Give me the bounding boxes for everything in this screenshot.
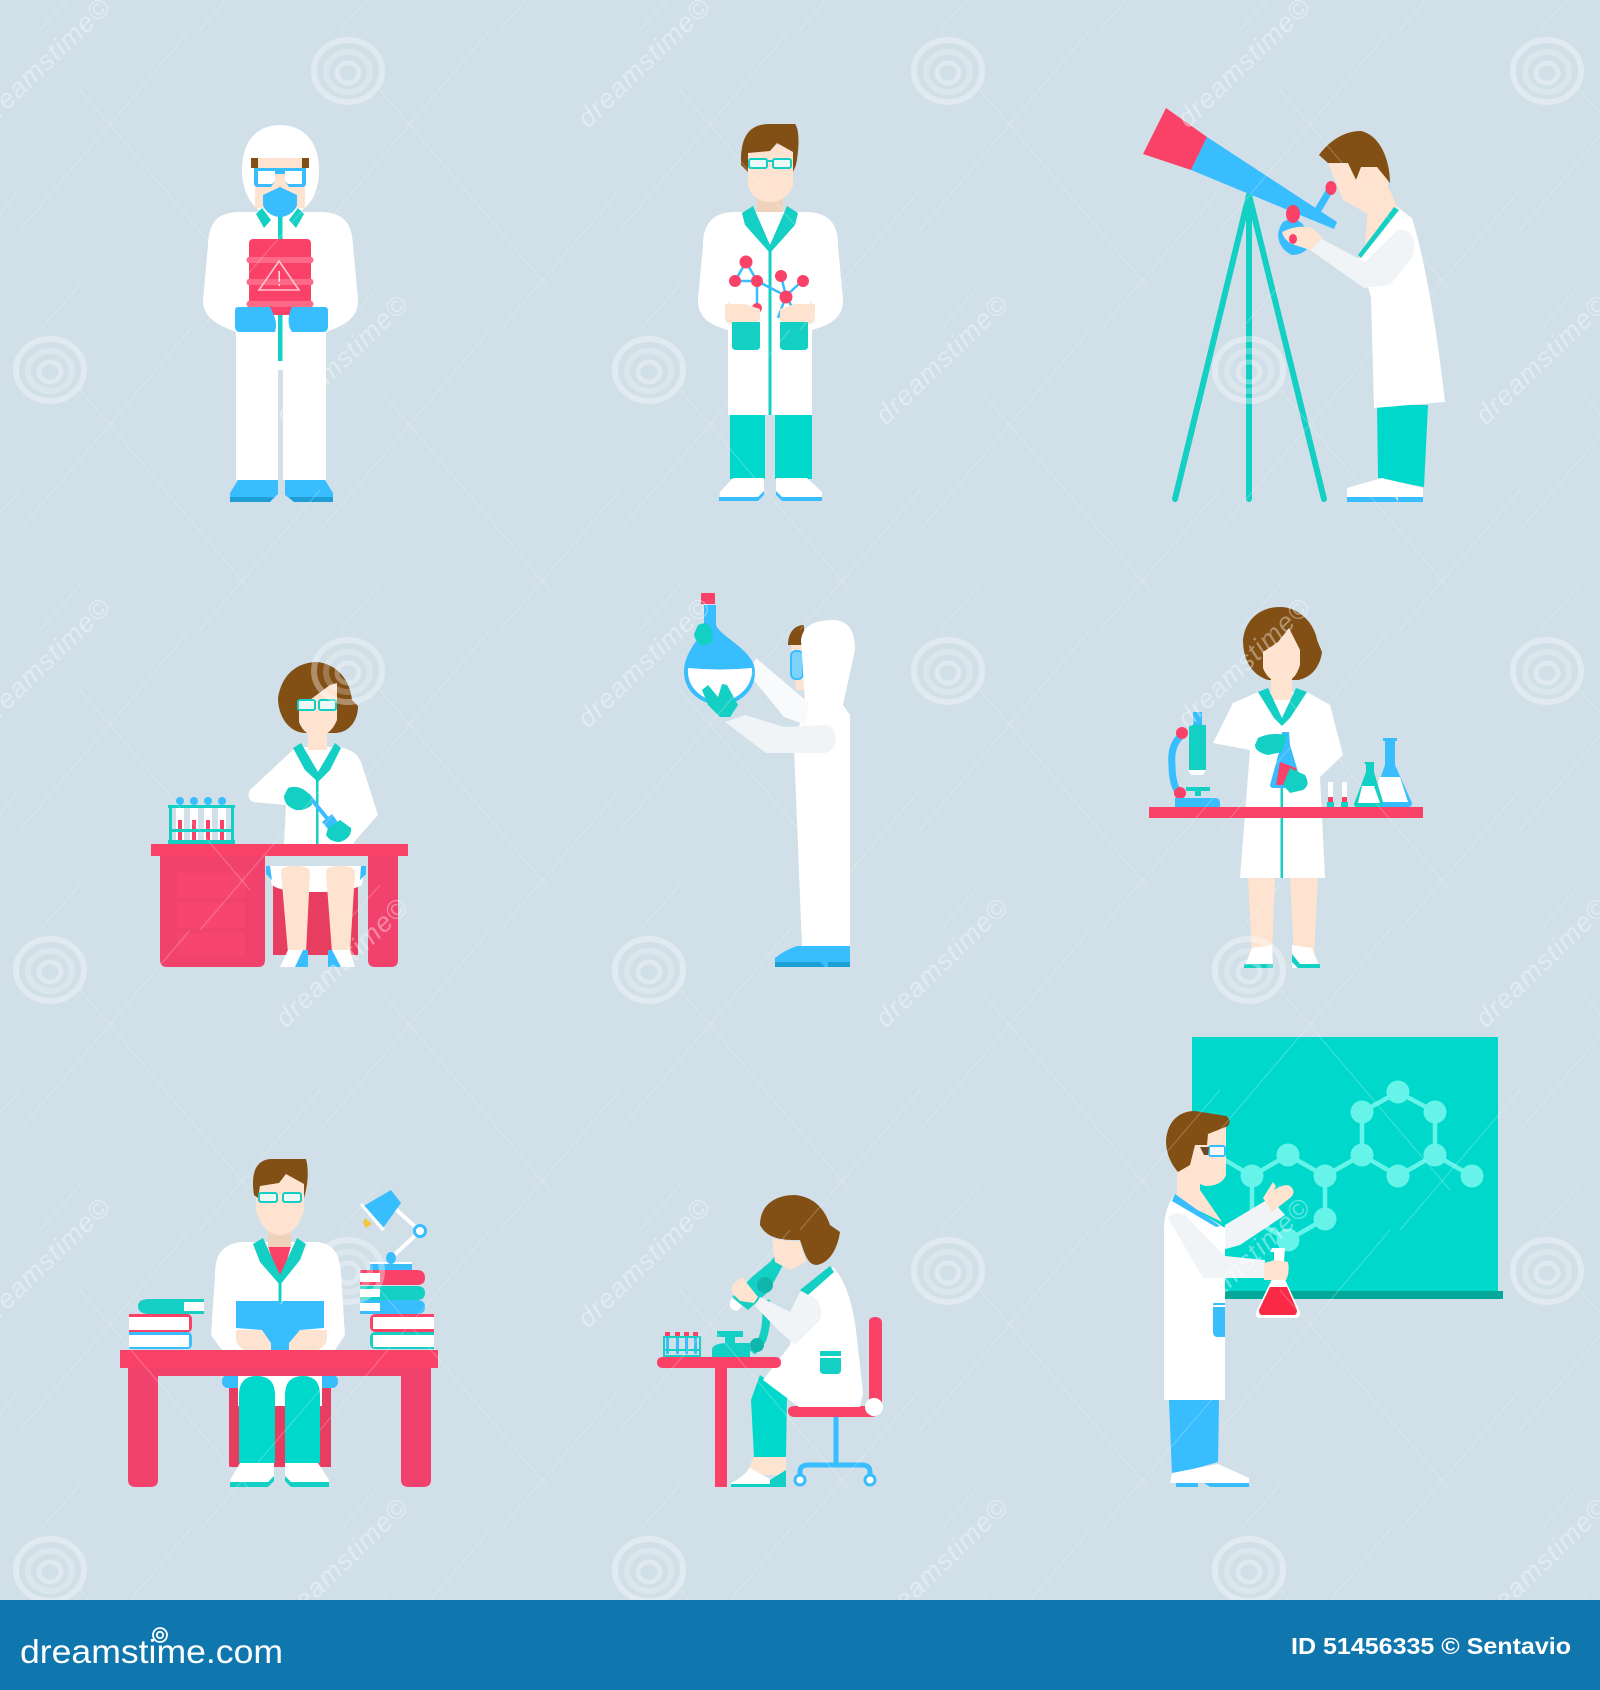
barrel (246, 239, 314, 315)
knob pink parts (1286, 205, 1300, 223)
neck (1271, 675, 1292, 700)
coat (249, 747, 378, 844)
trousers (730, 415, 812, 479)
lower arm (725, 715, 836, 753)
shoe (1347, 478, 1423, 497)
goggle (791, 651, 803, 679)
raised arm (1222, 1198, 1285, 1250)
boot sole (775, 962, 850, 967)
hair tufts (251, 158, 309, 168)
pipette tip (322, 814, 342, 836)
collar (1358, 207, 1399, 258)
hands (725, 304, 815, 325)
boots (230, 480, 333, 502)
pockets (732, 322, 808, 350)
glasses (749, 159, 791, 168)
shirt (268, 1246, 291, 1285)
shoe sole (731, 1484, 771, 1487)
boot (775, 946, 850, 967)
left book stack (129, 1299, 204, 1349)
focus knob (1278, 219, 1310, 255)
drawers (177, 873, 245, 957)
hair (741, 124, 798, 172)
shoe accents (1244, 954, 1320, 968)
upper arm (748, 658, 809, 725)
face (1328, 163, 1390, 213)
lab coat (1359, 207, 1445, 408)
watermark text: dreamstime© (869, 892, 1014, 1033)
watermark text: dreamstime© (571, 592, 716, 733)
lab coat (763, 1267, 863, 1407)
board (1192, 1037, 1498, 1291)
figure: scientist holding molecule (698, 124, 843, 501)
eyepiece (1318, 188, 1331, 210)
figure: woman scientist at desk (151, 662, 408, 967)
face (748, 145, 793, 202)
trousers (239, 1376, 320, 1463)
hair (1319, 131, 1390, 183)
face (1263, 628, 1300, 682)
chair back (229, 1388, 331, 1467)
trousers (1377, 405, 1428, 487)
watermark text: dreamstime© (269, 289, 414, 430)
telescope hood (1143, 108, 1207, 170)
collar (1258, 688, 1307, 726)
respirator mask (263, 187, 297, 217)
arm shadow (726, 300, 814, 322)
coat seam (316, 780, 318, 844)
table leg (715, 1368, 727, 1487)
figure: hazmat worker holding barrel (203, 125, 358, 502)
zipper (278, 215, 282, 361)
desk legs (128, 1368, 431, 1487)
lab table (1149, 807, 1423, 818)
neck (757, 188, 783, 218)
shoe heel (770, 1470, 786, 1487)
desk top (120, 1350, 438, 1368)
gloves (694, 623, 738, 717)
chair knob (865, 1398, 883, 1416)
figure: man reading at desk (120, 1159, 438, 1487)
shoes (1244, 945, 1320, 968)
seat edges (266, 866, 366, 880)
respirator straps (256, 208, 304, 228)
arm (1310, 230, 1414, 288)
face (255, 158, 305, 208)
watermark text: dreamstime© (869, 1492, 1014, 1633)
desk top (151, 844, 408, 856)
hand knob dot (1289, 234, 1297, 244)
figure: woman scientist at lab table (1149, 607, 1423, 968)
hands (236, 1330, 327, 1350)
shoe (1170, 1464, 1249, 1483)
shoes (280, 950, 355, 967)
shoes (230, 1463, 329, 1487)
tripod (1175, 195, 1324, 499)
coat seam (768, 250, 772, 415)
goggle lenses (258, 171, 302, 184)
shoe soles (230, 1476, 329, 1487)
body suit (794, 620, 855, 947)
legs (281, 866, 355, 953)
hood (242, 125, 319, 212)
pipette (308, 795, 335, 828)
glasses (1200, 1146, 1225, 1156)
hair (1166, 1111, 1230, 1172)
watermark text: dreamstime© (1171, 592, 1316, 733)
desk drawer unit (160, 856, 265, 967)
flask (1256, 1248, 1300, 1318)
flask cork (701, 593, 715, 604)
raised hand (1263, 1182, 1294, 1212)
shoe sole (1347, 497, 1423, 502)
collar (800, 1266, 834, 1295)
test tubes (1327, 782, 1348, 807)
desk lamp (360, 1190, 426, 1270)
face (299, 683, 337, 736)
microscope (712, 1255, 784, 1357)
face (791, 645, 804, 690)
coat (698, 212, 843, 415)
seat (268, 866, 365, 892)
microscope (1172, 712, 1220, 807)
hand (732, 1277, 758, 1303)
hand (1264, 1260, 1289, 1280)
gloves (1255, 734, 1308, 793)
small flask (1354, 762, 1383, 807)
hair (788, 625, 804, 645)
collar (253, 1238, 306, 1285)
glasses (259, 1193, 301, 1202)
seat white (238, 1376, 322, 1406)
flask (684, 605, 755, 705)
face (256, 1170, 304, 1235)
pocket (820, 1351, 841, 1374)
hair (253, 1159, 308, 1198)
coat seam (1280, 785, 1283, 878)
face (1190, 1125, 1226, 1186)
trousers (751, 1375, 787, 1457)
footer bar (0, 1600, 1600, 1690)
collar (293, 743, 341, 782)
hand flask (1270, 732, 1302, 788)
suit (203, 212, 358, 480)
footer logo text: dreamstime.com (20, 1633, 283, 1670)
neck (1365, 190, 1397, 245)
arm (755, 1292, 821, 1345)
shoes (719, 478, 822, 501)
telescope tube (1191, 137, 1337, 229)
watermark text: dreamstime© (269, 892, 414, 1033)
shoe sole (1176, 1483, 1249, 1487)
hair (760, 1195, 840, 1265)
boot soles (230, 497, 333, 502)
board ledge (1225, 1291, 1503, 1299)
shoe soles (719, 491, 822, 501)
watermark text: dreamstime© (1171, 1192, 1316, 1333)
table (657, 1357, 781, 1368)
neck (308, 730, 327, 750)
shoe (731, 1468, 786, 1487)
chair seat (222, 1375, 338, 1388)
gloves (284, 787, 351, 842)
molecule diagram (1225, 1080, 1484, 1252)
figure: scientist at chalkboard (1164, 1037, 1503, 1487)
desk right leg (368, 856, 398, 967)
glasses (298, 700, 336, 710)
foot skin (745, 1457, 786, 1475)
lab coat (1213, 692, 1343, 878)
hand (1282, 227, 1323, 250)
neck (268, 1225, 291, 1247)
open book (236, 1301, 324, 1350)
figure: woman with microscope (657, 1195, 883, 1487)
chair back (273, 875, 358, 955)
watermark text: dreamstime© (869, 289, 1014, 430)
goggles (254, 168, 306, 187)
collar (742, 206, 798, 253)
watermark text: dreamstime© (571, 1192, 716, 1333)
face (772, 1238, 806, 1270)
hair (1243, 607, 1322, 680)
coat seam (278, 1283, 282, 1303)
pocket (1213, 1303, 1225, 1337)
test rack (663, 1332, 701, 1357)
hair (278, 662, 358, 733)
shoe accents (295, 950, 341, 967)
gloves (235, 307, 328, 332)
big flask (1370, 738, 1412, 807)
lab coat (1164, 1196, 1225, 1400)
molecule model (729, 256, 809, 318)
figure: hazmat worker with flask (684, 593, 855, 967)
right book stack (360, 1270, 434, 1349)
neck (1177, 1165, 1222, 1222)
arm (1168, 1213, 1265, 1278)
logo spiral (153, 1628, 167, 1642)
figure: scientist with telescope (1143, 108, 1445, 502)
coat (211, 1242, 345, 1350)
collar (1172, 1194, 1220, 1227)
trousers (1169, 1400, 1219, 1475)
legs (1248, 878, 1318, 957)
eyepiece cap (1326, 181, 1336, 195)
chair (788, 1317, 882, 1485)
test tube rack (168, 797, 235, 844)
image id credit: ID 51456335 © Sentavio (1291, 1633, 1571, 1659)
watermark text: dreamstime© (269, 1492, 414, 1633)
desk underside (128, 1368, 431, 1376)
